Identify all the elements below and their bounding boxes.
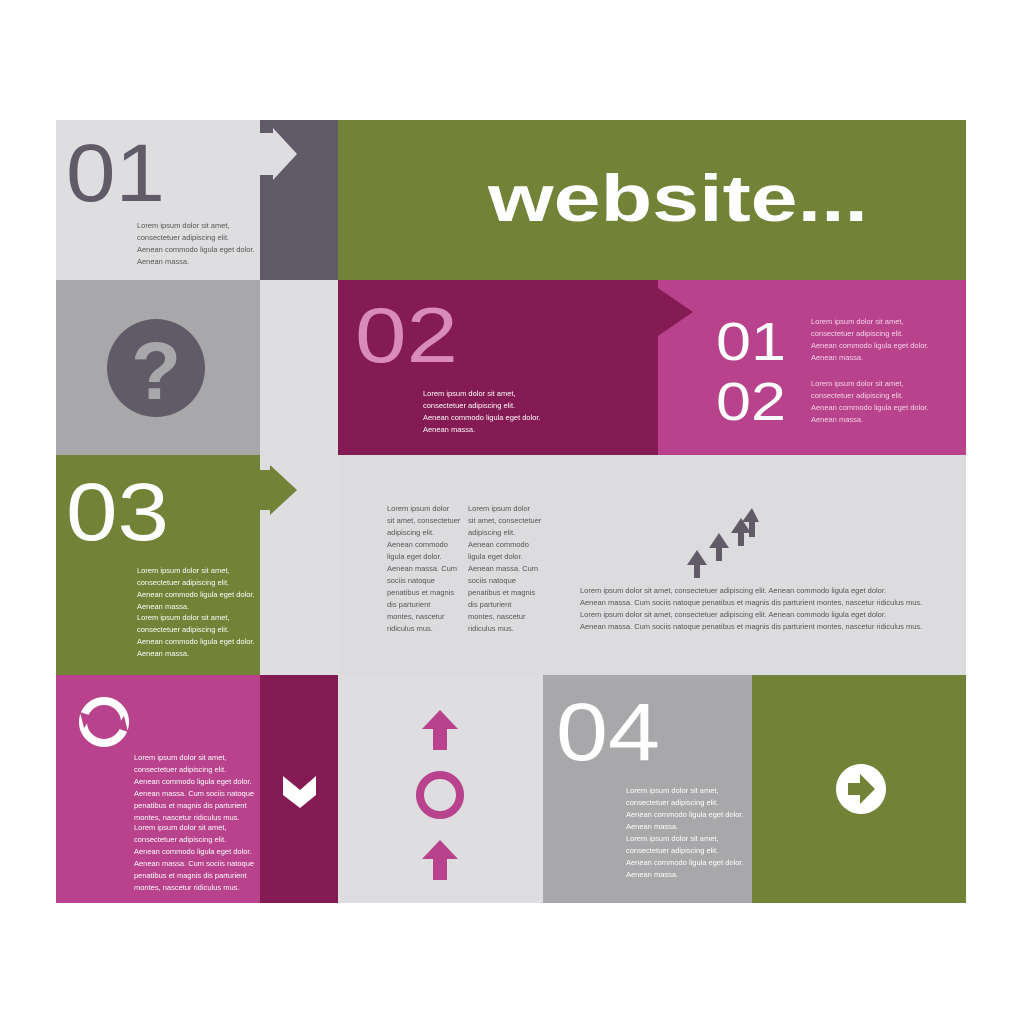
panel: middle text: Aenean massa. Cum sociis natoque penatibus et magnis dis parturient montes, nascetur ridiculus mus. bbox=[580, 598, 922, 607]
panel: middle text bbox=[338, 455, 966, 675]
panel: 04: consectetuer adipiscing elit. bbox=[626, 798, 718, 807]
panel: pink refresh: consectetuer adipiscing elit. bbox=[134, 835, 226, 844]
panel: 04 bbox=[543, 675, 752, 903]
panel: pink refresh: consectetuer adipiscing elit. bbox=[134, 765, 226, 774]
panel: middle text: adipiscing elit. bbox=[387, 528, 434, 537]
panel: pink refresh: Lorem ipsum dolor sit amet, bbox=[134, 823, 227, 832]
panel: middle text: Aenean commodo bbox=[468, 540, 529, 549]
panel: arrows and cycle bbox=[338, 675, 543, 903]
panel: dark arrow column bbox=[260, 120, 338, 280]
panel: 03: Aenean massa. bbox=[137, 649, 189, 658]
panel: middle text: adipiscing elit. bbox=[468, 528, 515, 537]
panel: pink refresh: Aenean commodo ligula eget dolor. bbox=[134, 847, 252, 856]
panel: middle text: sit amet, consectetuer bbox=[468, 516, 542, 525]
panel: 04: Aenean massa. bbox=[626, 822, 678, 831]
panel: middle text: ridiculus mus. bbox=[387, 624, 433, 633]
panel: 02: Lorem ipsum dolor sit amet, bbox=[423, 389, 516, 398]
panel: question bbox=[56, 280, 260, 455]
panel: pink refresh: montes, nascetur ridiculus mus. bbox=[134, 883, 239, 892]
panel: 03: consectetuer adipiscing elit. bbox=[137, 578, 229, 587]
panel: 01 bbox=[56, 120, 260, 280]
panel: 03: Aenean commodo ligula eget dolor. bbox=[137, 590, 255, 599]
panel: 01 02 pink: Aenean commodo ligula eget dolor. bbox=[811, 341, 929, 350]
panel: middle text: dis parturient bbox=[387, 600, 431, 609]
panel: question: ? bbox=[131, 326, 181, 417]
panel: pink refresh: Aenean commodo ligula eget dolor. bbox=[134, 777, 252, 786]
panel: 04: 04 bbox=[556, 687, 660, 778]
panel: 03: 03 bbox=[66, 467, 169, 558]
panel: middle text: ligula eget dolor. bbox=[468, 552, 523, 561]
panel: middle text: Aenean massa. Cum bbox=[468, 564, 538, 573]
panel: 02: Aenean massa. bbox=[423, 425, 475, 434]
panel: pink refresh: Lorem ipsum dolor sit amet, bbox=[134, 753, 227, 762]
panel: 01: Lorem ipsum dolor sit amet, bbox=[137, 221, 230, 230]
panel: 01 02 pink: 02 bbox=[716, 372, 786, 432]
panel: middle text: penatibus et magnis bbox=[468, 588, 535, 597]
panel: 01: Aenean commodo ligula eget dolor. bbox=[137, 245, 255, 254]
panel: 01 02 pink: Aenean massa. bbox=[811, 353, 863, 362]
panel: 03 bbox=[56, 455, 297, 675]
panel: middle text: dis parturient bbox=[468, 600, 512, 609]
icon: stair arrows bbox=[687, 508, 759, 578]
panel: middle text: Lorem ipsum dolor sit amet, consectetuer adipiscing elit. Aenean commodo ligula eget dolor. bbox=[580, 586, 886, 595]
panel: middle text: montes, nascetur bbox=[468, 612, 526, 621]
panel: 01 02 pink: consectetuer adipiscing elit. bbox=[811, 329, 903, 338]
panel: 03: Lorem ipsum dolor sit amet, bbox=[137, 613, 230, 622]
panel: website title bbox=[338, 120, 966, 280]
panel: 04: Aenean commodo ligula eget dolor. bbox=[626, 858, 744, 867]
panel: 01 02 pink bbox=[658, 280, 966, 455]
panel: pink refresh: penatibus et magnis dis parturient bbox=[134, 801, 247, 810]
light connector column bbox=[260, 280, 338, 675]
panel: 03: Aenean commodo ligula eget dolor. bbox=[137, 637, 255, 646]
panel: 04: consectetuer adipiscing elit. bbox=[626, 846, 718, 855]
panel: pink refresh: Aenean massa. Cum sociis natoque bbox=[134, 859, 254, 868]
panel: 01 02 pink: 01 bbox=[716, 312, 786, 372]
panel: middle text: sit amet, consectetuer bbox=[387, 516, 461, 525]
panel: 02 bbox=[338, 280, 658, 455]
panel: middle text: Lorem ipsum dolor bbox=[468, 504, 531, 513]
panel: middle text: Aenean commodo bbox=[387, 540, 448, 549]
panel: middle text: Lorem ipsum dolor sit amet, consectetuer adipiscing elit. Aenean commodo ligula eget dolor. bbox=[580, 610, 886, 619]
panel: 01: consectetuer adipiscing elit. bbox=[137, 233, 229, 242]
panel: check column bbox=[260, 675, 375, 903]
panel: pink refresh: Aenean massa. Cum sociis natoque bbox=[134, 789, 254, 798]
panel: 04: Aenean massa. bbox=[626, 870, 678, 879]
panel: middle text: Aenean massa. Cum sociis natoque penatibus et magnis dis parturient montes, nascetur ridiculus mus. bbox=[580, 622, 922, 631]
panel: 04: Lorem ipsum dolor sit amet, bbox=[626, 786, 719, 795]
panel: middle text: sociis natoque bbox=[387, 576, 435, 585]
panel: 04: Lorem ipsum dolor sit amet, bbox=[626, 834, 719, 843]
panel: 01 02 pink: consectetuer adipiscing elit. bbox=[811, 391, 903, 400]
panel: middle text: sociis natoque bbox=[468, 576, 516, 585]
panel: 02: Aenean commodo ligula eget dolor. bbox=[423, 413, 541, 422]
panel: middle text: penatibus et magnis bbox=[387, 588, 454, 597]
panel: middle text: montes, nascetur bbox=[387, 612, 445, 621]
panel: 01 02 pink: Lorem ipsum dolor sit amet, bbox=[811, 317, 904, 326]
panel: 03: consectetuer adipiscing elit. bbox=[137, 625, 229, 634]
panel: pink refresh bbox=[56, 675, 260, 903]
panel: 02: 02 bbox=[355, 291, 458, 379]
panel: 01: 01 bbox=[66, 128, 165, 219]
panel: 02: consectetuer adipiscing elit. bbox=[423, 401, 515, 410]
panel: pink refresh: penatibus et magnis dis parturient bbox=[134, 871, 247, 880]
panel: 01 02 pink: Aenean commodo ligula eget dolor. bbox=[811, 403, 929, 412]
panel: 04: Aenean commodo ligula eget dolor. bbox=[626, 810, 744, 819]
panel: 01 02 pink: Lorem ipsum dolor sit amet, bbox=[811, 379, 904, 388]
panel: green next bbox=[752, 675, 966, 903]
panel: 03: Aenean massa. bbox=[137, 602, 189, 611]
panel: middle text: ligula eget dolor. bbox=[387, 552, 442, 561]
panel: 01: Aenean massa. bbox=[137, 257, 189, 266]
panel: 03: Lorem ipsum dolor sit amet, bbox=[137, 566, 230, 575]
panel: middle text: Aenean massa. Cum bbox=[387, 564, 457, 573]
panel: website title: website... bbox=[487, 161, 868, 235]
panel: middle text: Lorem ipsum dolor bbox=[387, 504, 450, 513]
panel: middle text: ridiculus mus. bbox=[468, 624, 514, 633]
panel: 01 02 pink: Aenean massa. bbox=[811, 415, 863, 424]
panel: pink refresh: montes, nascetur ridiculus mus. bbox=[134, 813, 239, 822]
